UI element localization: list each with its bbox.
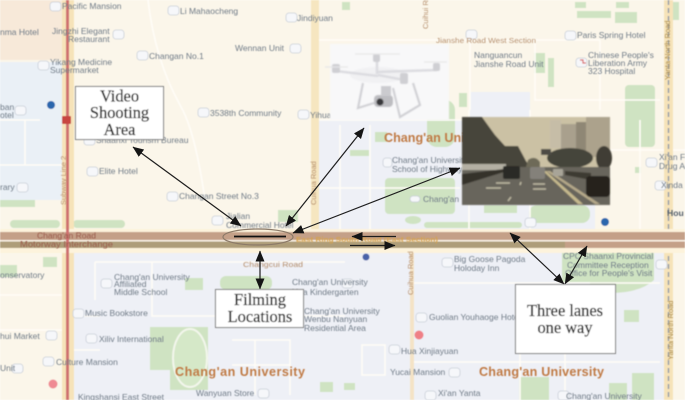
callout: three lanes one way: Three lanes: [527, 301, 603, 320]
arrow: three lanes to far road: [565, 246, 587, 284]
map labels: School of Highway: [392, 164, 463, 174]
map labels: Hua Xinjiayuan: [401, 346, 458, 356]
map labels: Residential Area: [304, 323, 366, 333]
main road: [0, 229, 685, 253]
callout: filming locations: Locations: [228, 307, 292, 326]
map labels: 323 Hospital: [588, 66, 635, 76]
drone arms: [336, 60, 437, 80]
map labels: Paris Spring Hotel: [577, 30, 646, 40]
map labels: hui Market: [0, 331, 40, 341]
callout: video shooting area: Video: [100, 86, 139, 106]
map labels: Yucai Mansion: [390, 367, 446, 377]
map labels: otel: [0, 110, 14, 120]
arrow: to street photo: [293, 168, 460, 233]
arrow: lane direction east: [350, 244, 395, 246]
arrow: three lanes to near road: [510, 233, 564, 284]
drone landing legs: [358, 83, 420, 117]
running track: [173, 329, 207, 387]
map labels: Motorway Interchange: [20, 240, 114, 249]
map labels: Pacific Mansion: [62, 1, 122, 11]
map labels: Chang'an University: [384, 131, 505, 145]
map labels: ban: [0, 102, 14, 112]
annotation: filming segment line: [234, 236, 286, 238]
callout: video shooting area: Area: [104, 120, 136, 139]
map labels: Yanta North Road: [666, 301, 675, 360]
arrow: lane direction west: [352, 236, 396, 238]
callout: filming locations: Filming: [234, 290, 286, 309]
map labels: Changan Street No.3: [179, 191, 259, 201]
map labels: Chang'an University: [479, 365, 604, 379]
map labels: Guolian Youhaoge Hotel: [429, 312, 521, 322]
map labels: Changcui Road: [243, 260, 303, 269]
drone body: [350, 67, 406, 83]
callout: three lanes one way: [516, 284, 616, 354]
map labels: Holoday Inn: [454, 263, 500, 273]
map labels: Jialian: [226, 211, 250, 221]
map labels: Affiliated: [114, 279, 147, 289]
map labels: Restaurant: [68, 34, 110, 44]
drone motors: [332, 54, 440, 84]
map labels: Xi'an Yanta: [438, 388, 481, 398]
callout: three lanes one way: one way: [537, 318, 593, 337]
map labels: Yanta North Road: [663, 21, 672, 80]
arrow: to video shooting area: [133, 147, 241, 226]
map labels: Liberation Army: [588, 58, 648, 68]
photo: street scene: [462, 117, 612, 205]
transit marker: [62, 116, 71, 124]
map labels: Yihua: [310, 110, 332, 120]
map labels: Chang'an University: [304, 306, 381, 316]
arrow: to filming locations: [259, 251, 261, 289]
map labels: Shaanxi Tourism Bureau: [96, 135, 189, 145]
map labels: onservatory: [0, 270, 45, 280]
map labels: Middle School: [114, 287, 168, 297]
callout: filming locations: [216, 290, 304, 328]
map labels: Xiliv International: [99, 334, 164, 344]
map labels: Unit: [0, 363, 16, 373]
map labels: Wennan Unit: [235, 43, 285, 53]
map labels: Wenbu Nanyuan: [304, 314, 367, 324]
map labels: rary: [0, 182, 15, 192]
map labels: Chinese People's: [588, 50, 654, 60]
map labels: Cuihua Road: [309, 161, 318, 205]
map labels: Chang'an: [423, 194, 459, 204]
map labels: Chang'an University: [175, 365, 305, 379]
drone gimbal camera: [374, 95, 393, 107]
map labels: Hua Kindergarten: [292, 287, 359, 297]
map labels: Wanyuan Store: [196, 388, 255, 398]
map labels: CPC Shaanxi Provincial: [563, 251, 653, 261]
map labels: Xinda: [661, 180, 683, 190]
map labels: Li Mahaocheng: [180, 6, 238, 16]
map labels: Jianshe Road West Section: [436, 36, 536, 45]
map labels: Cuihua Road: [406, 251, 415, 295]
map labels: Committee Reception: [567, 260, 649, 270]
map labels: Subway Line 2: [59, 156, 68, 205]
map labels: Supermarket: [50, 65, 99, 75]
map labels: Chang'an University: [292, 277, 369, 287]
map labels: Music Bookstore: [85, 308, 148, 318]
map labels: Jingzhi Elegant: [52, 26, 110, 36]
map labels: Hou: [667, 208, 684, 218]
photo: drone: [325, 44, 449, 120]
map labels: Big Goose Pagoda: [454, 254, 526, 264]
annotation: filming location ellipse: [223, 229, 293, 245]
callout: video shooting area: [76, 86, 164, 140]
map labels: Culture Mansion: [56, 357, 118, 367]
callout: video shooting area: Shooting: [90, 103, 149, 122]
map labels: Commercial Hotel: [226, 220, 294, 230]
map labels: Chang'an University: [392, 155, 469, 165]
vertical roads: [62, 0, 74, 400]
map labels: Chang'an Road: [37, 232, 96, 240]
map labels: Jindiyuan: [297, 13, 333, 23]
arrow: to drone: [286, 128, 364, 226]
map labels: 3538th Community: [210, 108, 282, 118]
drone propellers: [325, 54, 447, 67]
map labels: Elite Hotel: [99, 166, 138, 176]
map labels: Nanguancun: [474, 50, 522, 60]
map labels: Yikang Medicine: [50, 57, 112, 67]
map labels: Jianshe Road Unit: [474, 59, 544, 69]
map labels: Changan No.1: [149, 51, 204, 61]
map labels: Chang'an University: [114, 272, 191, 282]
map labels: East Ring South Road (East Section): [296, 235, 439, 244]
map labels: nma Hotel: [0, 27, 39, 37]
map labels: Office for People's Visit: [565, 268, 653, 278]
